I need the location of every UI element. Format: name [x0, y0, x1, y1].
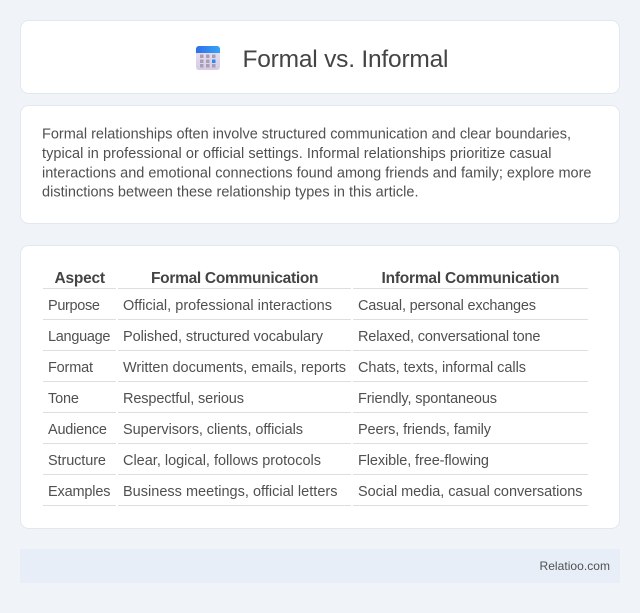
row: examples: Business meetings, official letters	[123, 484, 338, 500]
row: tone: Friendly, spontaneous	[358, 391, 497, 407]
panel: comparison table	[20, 246, 620, 528]
row: examples	[48, 484, 582, 500]
table header	[54, 270, 560, 287]
row: purpose	[48, 298, 536, 314]
row: structure	[48, 453, 489, 469]
row: structure: Clear, logical, follows protocols	[123, 453, 321, 469]
text block: introduction	[42, 126, 592, 200]
row: language: Language	[48, 329, 110, 345]
panel: introduction	[20, 106, 620, 224]
table header: Formal Communication	[151, 270, 318, 287]
row: language: Relaxed, conversational tone	[358, 329, 540, 345]
table header: Aspect	[54, 270, 105, 287]
text block: introduction: typical in professional or official settings. Informal relationships prioritize casual	[42, 146, 552, 162]
row: format: Format	[48, 360, 93, 376]
row: purpose: Purpose	[48, 298, 100, 314]
text block: introduction: Formal relationships often involve structured communication and clear boundaries,	[42, 126, 571, 142]
row: language: Polished, structured vocabulary	[123, 329, 324, 345]
row: structure: Flexible, free-flowing	[358, 453, 489, 469]
row: tone: Respectful, serious	[123, 391, 244, 407]
row: tone: Tone	[48, 391, 79, 407]
row: examples: Social media, casual conversations	[358, 484, 582, 500]
panel: title header	[20, 20, 620, 94]
row: structure: Structure	[48, 453, 106, 469]
row: format	[48, 360, 526, 376]
row: audience: Supervisors, clients, officials	[123, 422, 303, 438]
footer	[20, 549, 620, 583]
text block: introduction: interactions and emotional connections found among friends and family; explore more	[42, 166, 592, 182]
table header: Informal Communication	[382, 270, 560, 287]
row: audience: Audience	[48, 422, 107, 438]
footer credit: Relatioo.com	[540, 559, 610, 573]
row: tone	[48, 391, 497, 407]
row: format: Chats, texts, informal calls	[358, 360, 526, 376]
icon: calendar	[196, 46, 220, 70]
row: purpose: Official, professional interactions	[123, 298, 332, 314]
text block: introduction: distinctions between these relationship types in this article.	[42, 184, 418, 200]
row: audience: Peers, friends, family	[358, 422, 492, 438]
row: purpose: Casual, personal exchanges	[358, 298, 536, 314]
row: examples: Examples	[48, 484, 110, 500]
row: audience	[48, 422, 492, 438]
title: Formal vs. Informal	[242, 46, 448, 73]
row: format: Written documents, emails, reports	[123, 360, 346, 376]
row: language	[48, 329, 540, 345]
